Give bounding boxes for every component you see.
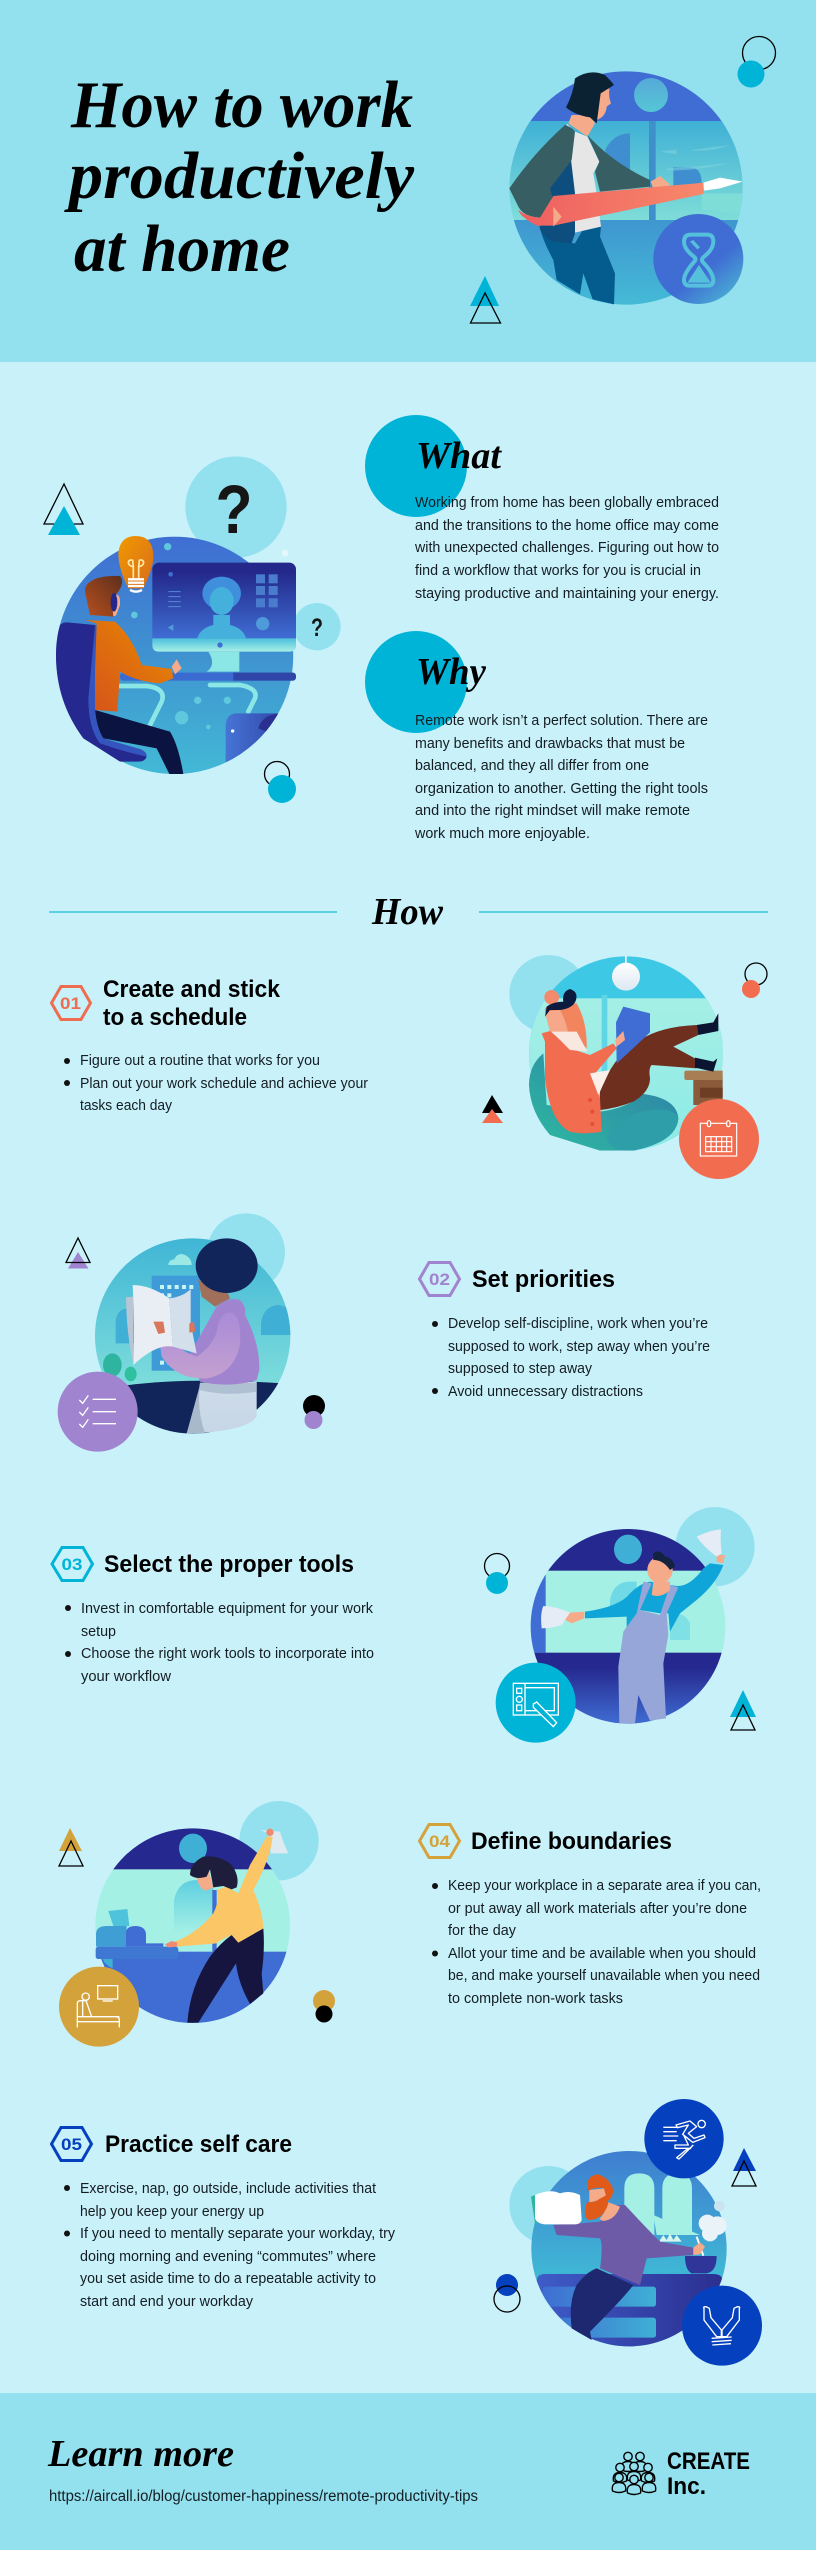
bullet list: start and end your workday: [80, 2293, 253, 2310]
icon: hourglass: [653, 214, 743, 304]
decoration: ring and dot: [484, 1554, 510, 1594]
heading: [103, 976, 281, 1031]
panel: step 03: [52, 1507, 756, 1743]
illustration: person reading with feet up: [509, 955, 759, 1179]
man figure: [531, 2174, 705, 2340]
monitor: [152, 563, 296, 672]
question bubble small: [293, 603, 341, 650]
text block: find a workflow that works for you is crucial in: [415, 562, 701, 579]
heading: Select the proper tools: [104, 1551, 354, 1578]
heading: Why: [416, 651, 486, 693]
person at desk: [56, 576, 183, 774]
heading: to a schedule: [103, 1004, 247, 1031]
decoration: triangles: [732, 2148, 756, 2186]
text block: [414, 712, 708, 842]
figure leaning forward: [165, 1829, 274, 2023]
panel: step 04: [59, 1801, 761, 2047]
bullet list: Figure out a routine that works for you: [80, 1052, 320, 1069]
decoration: triangles: [482, 1095, 503, 1123]
panel: footer: [0, 2393, 816, 2550]
illustration: person in overalls holding papers: [496, 1507, 755, 1743]
illustration: video call at a desk: [53, 456, 341, 778]
bullet list: Develop self-discipline, work when you’re: [448, 1315, 708, 1332]
company name: CREATE: [667, 2448, 750, 2475]
bullet list: If you need to mentally separate your workday, try: [80, 2225, 395, 2242]
icon: large question mark: ?: [216, 471, 252, 548]
panel: intro: [44, 415, 719, 842]
title: at home: [74, 212, 290, 286]
text block: and the transitions to the home office may come: [415, 517, 719, 534]
icon: light bulb: [118, 536, 153, 592]
bullet list: tasks each day: [80, 1097, 172, 1114]
bullet list: help you keep your energy up: [80, 2203, 264, 2220]
icon: calendar: [679, 1099, 759, 1179]
bullet list: supposed to step away: [448, 1360, 592, 1377]
text block: balanced, and they all differ from one: [415, 757, 649, 774]
heading: What: [416, 435, 502, 477]
icon: small question mark: ?: [311, 614, 323, 642]
title: How to work: [70, 68, 413, 142]
plant pot and steam: [685, 2201, 727, 2273]
text block: staying productive and maintaining your energy.: [415, 585, 719, 602]
decoration: dot and ring: [494, 2274, 520, 2312]
question bubble large: [185, 456, 287, 558]
bullet list: Keep your workplace in a separate area if you can,: [448, 1877, 761, 1894]
title: [64, 68, 414, 286]
bullet list: [432, 1315, 710, 1400]
text block: Working from home has been globally embraced: [415, 494, 719, 511]
bullet list: setup: [81, 1623, 116, 1640]
number badge: [52, 986, 90, 1020]
icon: hands and bulb: [682, 2286, 762, 2366]
text block: organization to another. Getting the right tools: [415, 780, 708, 797]
illustration: person standing at a printer: [59, 1801, 319, 2047]
bullet list: Exercise, nap, go outside, include activities that: [80, 2180, 377, 2197]
heading: Create and stick: [103, 976, 281, 1003]
heading: Practice self care: [105, 2131, 292, 2158]
bullet list: [64, 1052, 368, 1114]
number badge: 05: [61, 2135, 82, 2154]
bullet list: Avoid unnecessary distractions: [448, 1383, 643, 1400]
bullet list: Invest in comfortable equipment for your work: [81, 1600, 373, 1617]
pendant lamp: [179, 1834, 207, 1863]
divider heading: how: How: [371, 891, 444, 933]
decoration: dots: [303, 1395, 325, 1429]
source link: https://aircall.io/blog/customer-happiness/remote-productivity-tips: [49, 2488, 478, 2505]
desk: [120, 673, 296, 681]
number badge: 04: [429, 1832, 451, 1851]
bullet list: Allot your time and be available when you should: [448, 1945, 756, 1962]
icon: group of people: [612, 2452, 656, 2494]
icon: runner: [644, 2099, 724, 2178]
footer heading: Learn more: [47, 2433, 234, 2475]
pendant lamp: [612, 956, 640, 991]
number badge: [52, 1548, 92, 1580]
icon: checklist: [58, 1372, 138, 1452]
bullet list: doing morning and evening “commutes” where: [80, 2248, 376, 2265]
decoration: ring and dot: [738, 36, 776, 88]
section: what: [365, 415, 719, 602]
heading: Define boundaries: [471, 1828, 672, 1855]
reader figure: [542, 989, 718, 1133]
decoration: triangles: [44, 484, 83, 535]
woman figure: [509, 72, 743, 304]
number badge: 01: [60, 994, 81, 1013]
bullet list: you set aside time to do a repeatable activity to: [80, 2270, 376, 2287]
company name: Inc.: [667, 2473, 706, 2500]
title: productively: [64, 139, 414, 213]
decoration: triangles: [470, 276, 500, 323]
decoration: triangles: [730, 1690, 756, 1730]
bullet list: [65, 1600, 374, 1685]
section: why: [365, 631, 708, 842]
bullet list: [64, 2180, 395, 2310]
number badge: [52, 2128, 92, 2160]
decoration: triangles: [59, 1828, 83, 1866]
printer on desk: [96, 1909, 178, 1968]
bullet list: your workflow: [81, 1668, 171, 1685]
panel: step 05: [52, 2099, 762, 2366]
figure in overalls: [541, 1529, 725, 1723]
text block: and into the right mindset will make remote: [415, 802, 690, 819]
pendant lamp: [614, 1535, 642, 1564]
illustration: person reading a book: [58, 1213, 293, 1452]
icon: drawing tablet: [496, 1663, 576, 1743]
panel: header: [0, 0, 816, 362]
decoration: ring and dot: [742, 963, 767, 998]
panel: step 01: [52, 955, 767, 1179]
illustration: woman holding a giant pen: [507, 70, 747, 307]
number badge: 03: [62, 1555, 82, 1574]
number badge: [420, 1262, 460, 1296]
text block: with unexpected challenges. Figuring out how to: [414, 539, 719, 556]
bullet list: Choose the right work tools to incorporate into: [81, 1645, 374, 1662]
text block: work much more enjoyable.: [414, 825, 590, 842]
number badge: [420, 1824, 460, 1858]
accent circle: [365, 415, 467, 517]
bullet list: to complete non-work tasks: [448, 1990, 623, 2007]
decoration: triangles: [66, 1238, 90, 1268]
company name: [667, 2448, 750, 2500]
decoration: dots: [313, 1990, 335, 2022]
reader figure: [126, 1238, 259, 1433]
bullet list: supposed to work, step away when you’re: [448, 1338, 710, 1355]
text block: [414, 494, 719, 602]
panel: step 02: [58, 1213, 710, 1452]
bullet list: [432, 1877, 761, 2007]
decoration: ring and dot: [264, 762, 296, 803]
icon: couch and monitor: [59, 1967, 139, 2047]
accent circle: [365, 631, 467, 733]
desk: [693, 1078, 723, 1105]
pendant lamp: [634, 78, 668, 112]
pen: [518, 183, 704, 226]
text block: many benefits and drawbacks that must be: [415, 735, 685, 752]
bullet list: be, and make yourself unavailable when you need: [448, 1967, 760, 1984]
bullet list: or put away all work materials after you’re done: [448, 1900, 747, 1917]
illustration: bearded man reading on a sofa: [509, 2099, 762, 2366]
bullet list: Plan out your work schedule and achieve your: [80, 1075, 368, 1092]
heading: Set priorities: [472, 1266, 615, 1293]
number badge: 02: [429, 1270, 450, 1289]
bullet list: for the day: [448, 1922, 516, 1939]
text block: Remote work isn’t a perfect solution. There are: [415, 712, 708, 729]
